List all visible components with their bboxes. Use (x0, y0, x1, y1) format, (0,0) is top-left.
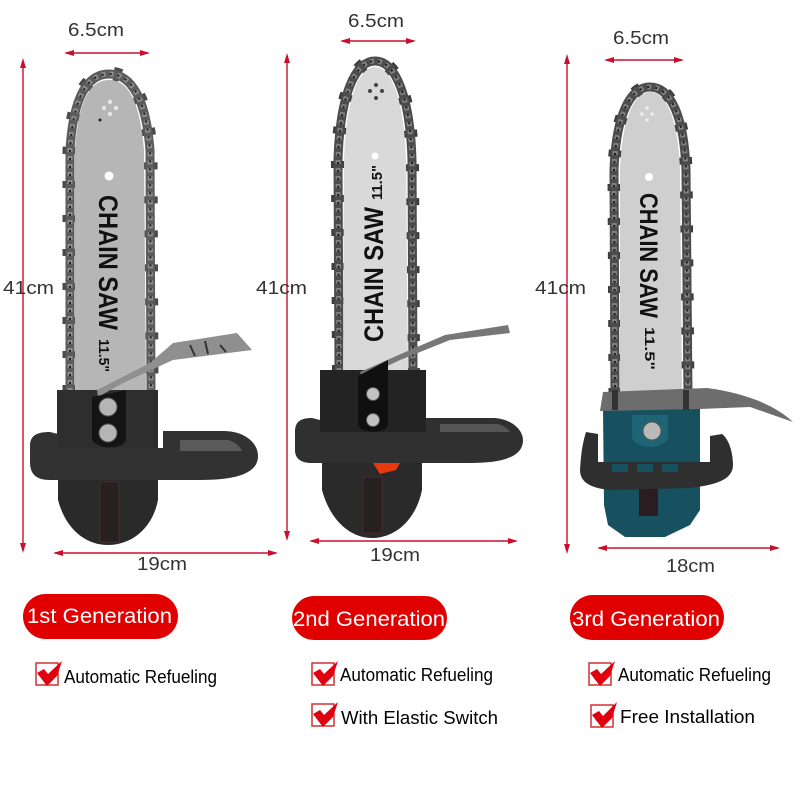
badge: 1st generation: 1st Generation (27, 605, 172, 628)
dimension arrows: saw 3 (564, 54, 780, 554)
bar label 3: CHAIN SAW (634, 193, 662, 318)
dimension labels: 19cm (370, 545, 420, 565)
dimension arrows: saw 1 (20, 50, 278, 556)
feature: automatic refueling, 1st: Automatic Refueling (64, 667, 217, 687)
spindle boss (632, 415, 668, 447)
handle 1 (30, 431, 258, 480)
metal plate 2 (360, 325, 510, 378)
plate slots 1 (190, 341, 226, 356)
lower housing 1 (58, 470, 158, 545)
panel: 2nd generation chainsaw (295, 61, 523, 538)
bar label 3: 11.5" (642, 327, 658, 370)
chain over plate (615, 390, 686, 410)
bar label 1: 11.5" (95, 339, 112, 372)
dimension labels: 6.5cm (613, 28, 669, 48)
lower housing 2 (322, 460, 422, 538)
bar holes 1 (98, 100, 118, 180)
dimension labels: 41cm (535, 278, 586, 298)
handle grips (612, 464, 678, 472)
feature: automatic refueling, 3rd (589, 661, 771, 686)
handle 2 (295, 418, 523, 463)
teal motor housing (603, 408, 700, 537)
bar holes 3 (640, 106, 654, 181)
upper housing 1 (57, 390, 158, 455)
handle 3 (580, 432, 733, 490)
mounting strap 2 (358, 360, 388, 432)
feature: automatic refueling, 2nd (312, 661, 493, 686)
handle inner opening 2 (440, 424, 510, 432)
feature: free installation: Free Installation (620, 707, 755, 727)
feature: automatic refueling, 1st (36, 661, 217, 687)
handle inner opening 1 (180, 440, 242, 451)
bar label 1: CHAIN SAW (93, 195, 123, 330)
dimension labels: 6.5cm (68, 20, 124, 40)
dimension labels: 6.5cm (348, 11, 404, 31)
bar label 2: 11.5" (369, 165, 386, 200)
dimension labels: 41cm (256, 278, 307, 298)
dimension arrows: saw 2 (284, 38, 518, 544)
trigger (373, 463, 400, 474)
screws 2 (366, 388, 380, 426)
model label 3 (639, 486, 658, 516)
spindle screw (643, 422, 661, 440)
badge: 3rd generation: 3rd Generation (572, 608, 720, 631)
metal plate 1 (97, 333, 252, 397)
panel: 1st generation chainsaw (30, 74, 258, 545)
feature: with elastic switch (312, 702, 498, 728)
model label 2 (363, 477, 382, 533)
badge: 2nd generation (292, 596, 447, 640)
dimension labels: 19cm (137, 554, 187, 574)
dimension labels: 41cm (3, 278, 54, 298)
badge: 3rd generation (570, 595, 724, 640)
guide bar 2 (343, 67, 408, 372)
feature: automatic refueling, 2nd: Automatic Refueling (340, 665, 493, 685)
mounting strap 1 (92, 390, 126, 448)
feature: automatic refueling, 3rd: Automatic Refueling (618, 665, 771, 685)
metal plate 3 (600, 388, 793, 422)
chain 1 (70, 74, 151, 392)
dimension labels: 18cm (666, 556, 715, 576)
bar label 2: CHAIN SAW (359, 207, 389, 342)
panel: 3rd generation chainsaw (580, 87, 793, 537)
badge: 2nd generation: 2nd Generation (293, 608, 445, 631)
chain 3 (614, 87, 688, 395)
badge: 1st generation (23, 594, 178, 639)
upper housing 2 (320, 370, 426, 432)
guide bar 3 (620, 92, 682, 395)
bar holes 2 (368, 83, 384, 160)
dimension labels (3, 11, 715, 576)
feature: with elastic switch: With Elastic Switch (341, 708, 498, 728)
guide bar 1 (75, 80, 146, 392)
chain 2 (338, 61, 413, 372)
model label 1 (100, 482, 119, 542)
screws 1 (99, 398, 117, 442)
feature: free installation (591, 702, 755, 728)
